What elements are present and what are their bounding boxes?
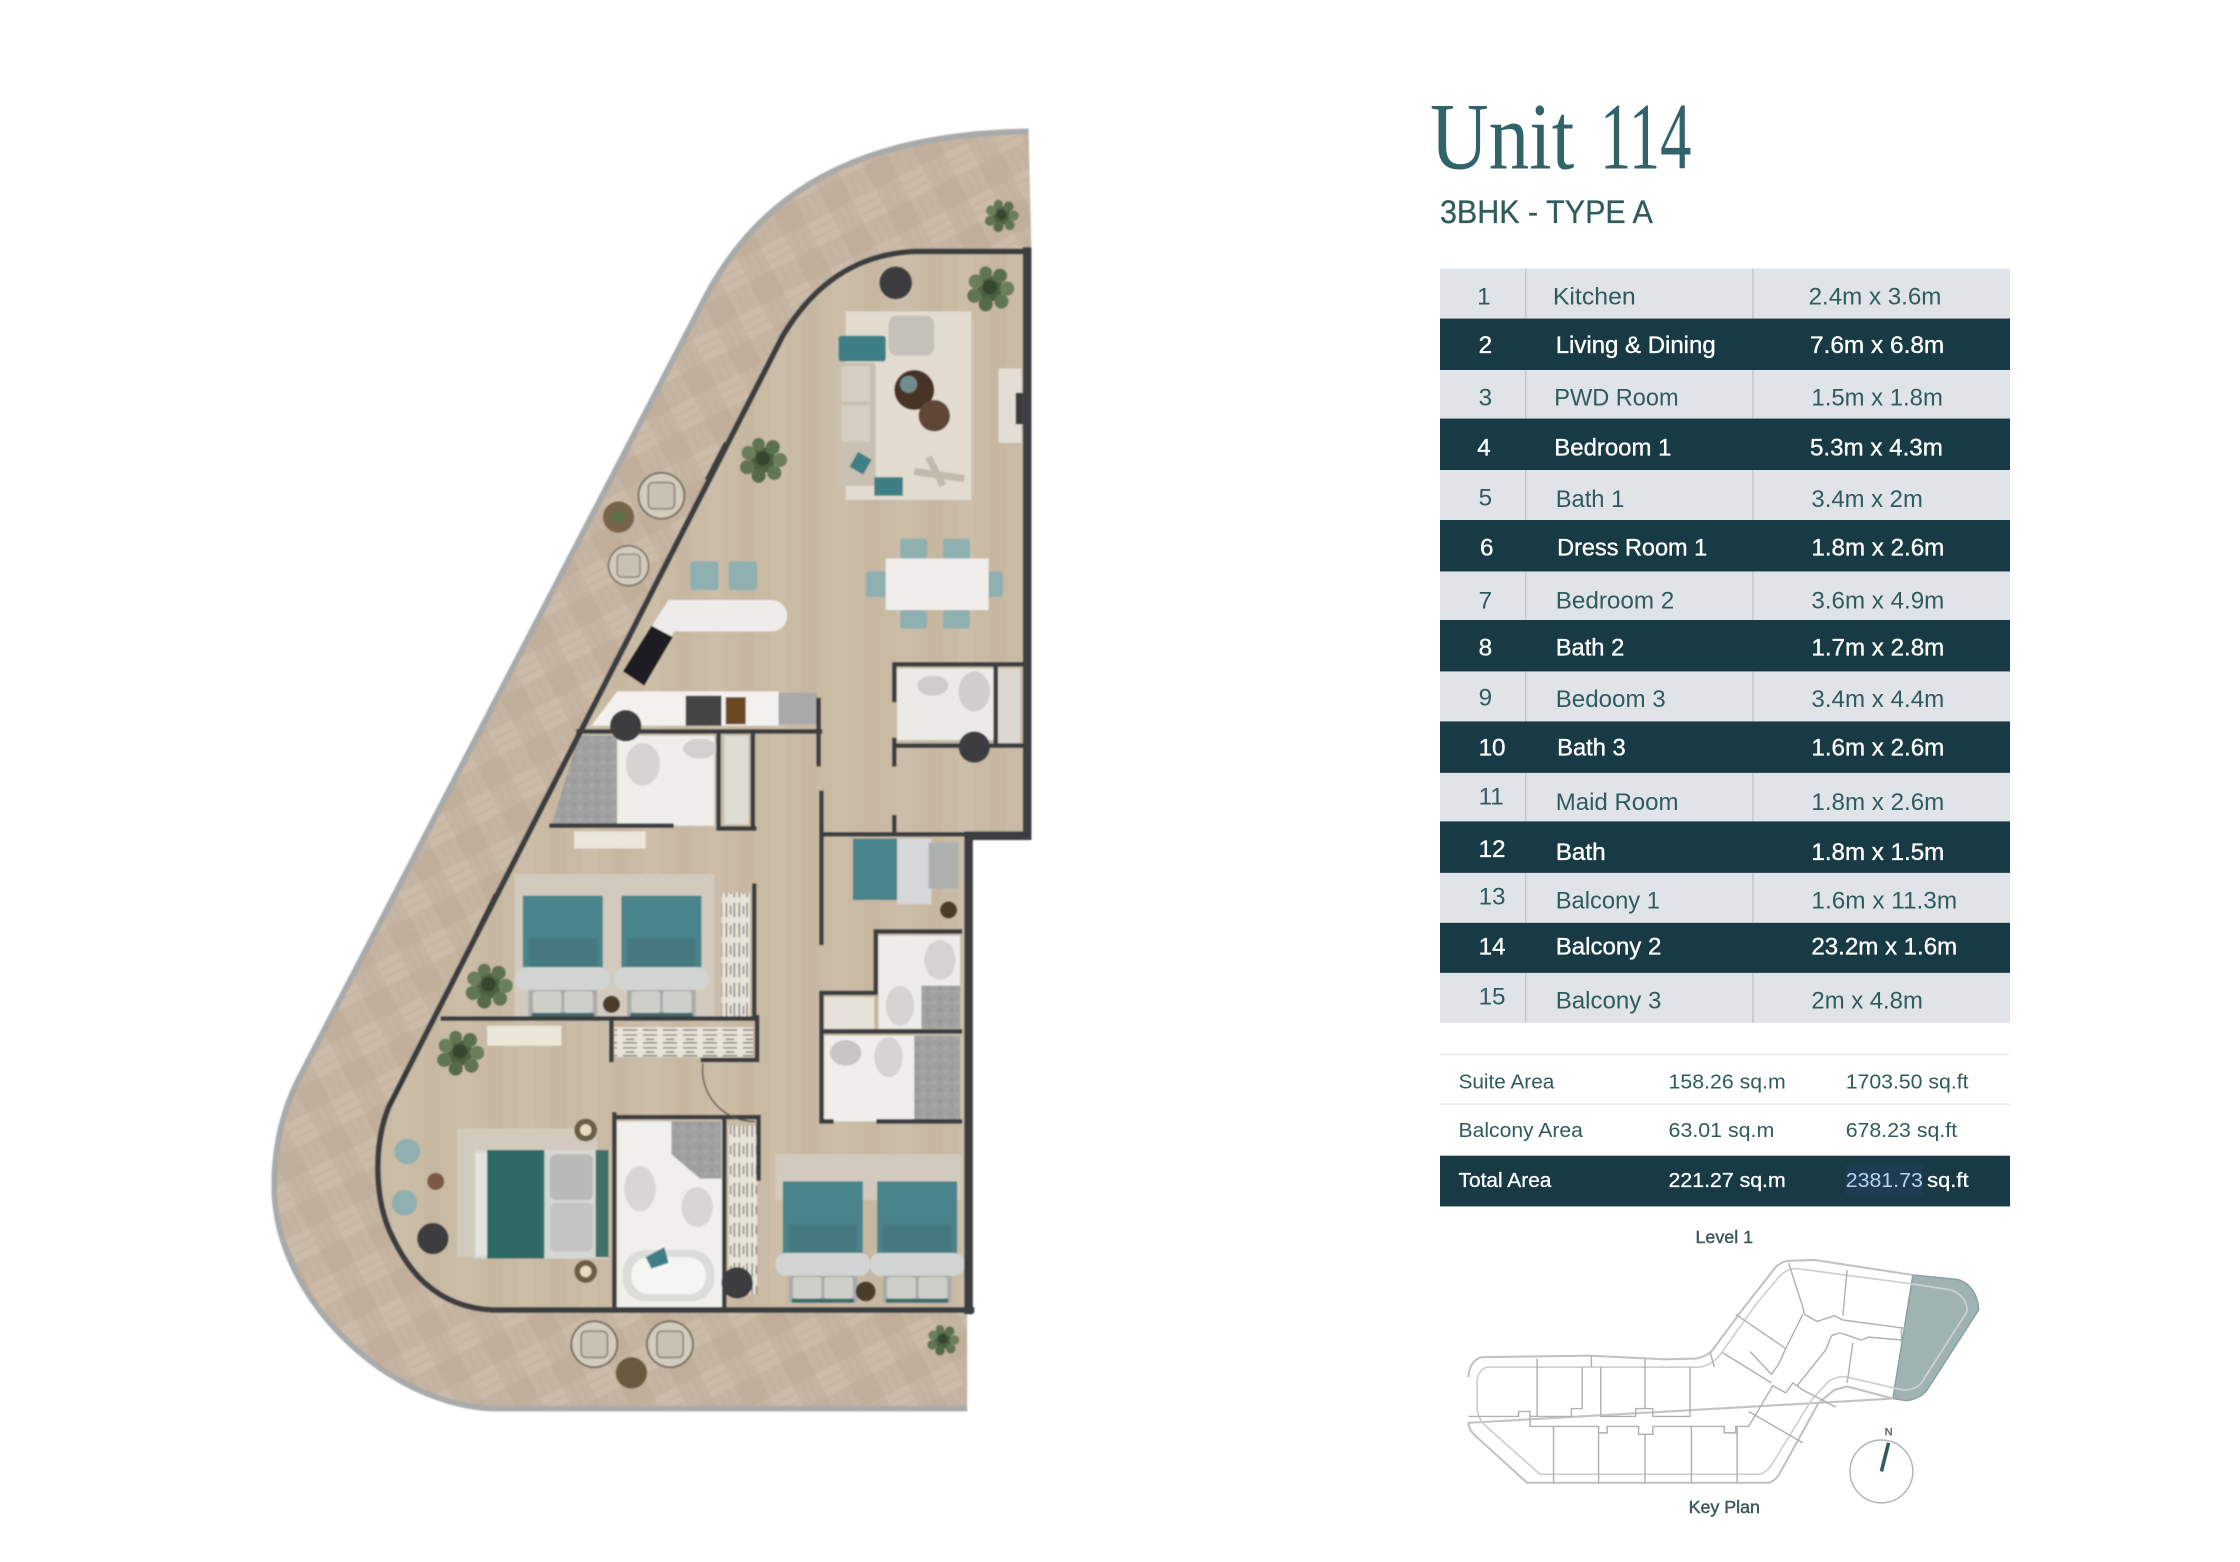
row 13 (1479, 883, 1957, 915)
key plan (1469, 1260, 1979, 1483)
row 12 (1479, 836, 1944, 866)
row 13: Balcony 1 (1556, 888, 1660, 915)
row 7 (1479, 588, 1944, 615)
balcony area: 63.01 sq.m (1669, 1119, 1774, 1142)
row 2: Living & Dining (1556, 332, 1716, 359)
row 1: 1 (1477, 283, 1491, 310)
row 14: 23.2m x 1.6m (1811, 933, 1957, 960)
row 9: 9 (1479, 685, 1492, 712)
balcony area: Balcony Area (1459, 1119, 1583, 1142)
title: 114 (1600, 84, 1691, 190)
subtitle: 3BHK - TYPE A (1440, 193, 1653, 230)
bath 2 (824, 1036, 960, 1121)
row 8: Bath 2 (1556, 635, 1624, 662)
row 1 (1477, 283, 1941, 310)
row 9: 3.4m x 4.4m (1811, 686, 1944, 713)
highlighted unit (1893, 1275, 1979, 1401)
walls (378, 251, 1027, 1310)
column (879, 266, 912, 299)
room schedule table (1440, 269, 2010, 1023)
row 12: Bath (1556, 839, 1606, 866)
row 1: 2.4m x 3.6m (1809, 283, 1941, 310)
row 4 (1477, 435, 1943, 462)
row 10: 10 (1479, 735, 1506, 762)
upper bath and closet (551, 736, 749, 849)
row 6: Dress Room 1 (1557, 535, 1707, 562)
stone balustrade rim (271, 129, 1029, 1411)
row 11: 1.8m x 2.6m (1811, 789, 1944, 816)
row 15: 15 (1479, 983, 1506, 1010)
total area: 221.27 sq.m (1669, 1169, 1786, 1192)
row 9: Bedoom 3 (1556, 686, 1666, 713)
suite area: Suite Area (1459, 1071, 1555, 1094)
area summary table (1440, 1054, 2010, 1206)
row 9 (1479, 685, 1944, 713)
row 8 (1479, 635, 1944, 662)
row 11 (1479, 783, 1944, 816)
master bedroom (391, 1119, 609, 1283)
row 15 (1479, 983, 1923, 1015)
row 6: 6 (1480, 535, 1493, 562)
master bath and wardrobe (617, 1121, 757, 1307)
terrace furniture (571, 473, 693, 1389)
row 4: Bedroom 1 (1554, 435, 1671, 462)
row 2: 7.6m x 6.8m (1810, 332, 1944, 359)
row 11: 11 (1479, 783, 1504, 810)
row 12: 1.8m x 1.5m (1811, 839, 1944, 866)
row 13: 13 (1479, 883, 1506, 910)
suite area: 1703.50 sq.ft (1846, 1071, 1969, 1094)
row 5: Bath 1 (1556, 486, 1624, 513)
dining set (866, 539, 1003, 629)
row 8: 8 (1479, 635, 1492, 662)
balcony area: 678.23 sq.ft (1846, 1119, 1957, 1142)
row 7: 7 (1479, 588, 1492, 615)
plants (437, 200, 1019, 1356)
row 14 (1479, 933, 1957, 960)
interior floor (378, 251, 1026, 1310)
row 2 (1479, 332, 1944, 359)
floor plan (257, 114, 1043, 1429)
row 6 (1480, 535, 1944, 562)
row 8: 1.7m x 2.8m (1811, 635, 1944, 662)
maid room (853, 839, 959, 919)
living area (839, 311, 1023, 500)
row 12: 12 (1479, 836, 1506, 863)
row 14: Balcony 2 (1556, 933, 1661, 960)
row 3: 1.5m x 1.8m (1811, 385, 1943, 412)
row 7: Bedroom 2 (1556, 588, 1674, 615)
bath 3 (824, 936, 960, 1029)
row 5: 3.4m x 2m (1811, 486, 1923, 513)
total area (1459, 1166, 1969, 1194)
bedroom 3 (776, 1154, 964, 1303)
row 3 (1479, 385, 1943, 412)
row 13: 1.6m x 11.3m (1811, 888, 1957, 915)
row 4: 4 (1477, 435, 1491, 462)
row 3: PWD Room (1554, 385, 1679, 412)
PWD room (897, 669, 1020, 743)
row 10: Bath 3 (1557, 735, 1626, 762)
row 5: 5 (1479, 485, 1492, 512)
compass: N (1884, 1427, 1893, 1439)
total area: Total Area (1459, 1169, 1552, 1192)
row 15: Balcony 3 (1556, 988, 1661, 1015)
row 1: Kitchen (1553, 283, 1636, 310)
compass (1850, 1427, 1913, 1503)
row 14: 14 (1479, 933, 1506, 960)
row 10 (1479, 735, 1944, 762)
bedroom 2 (487, 874, 753, 1057)
row 3: 3 (1479, 385, 1492, 412)
total area: 2381.73 (1846, 1169, 1923, 1192)
key plan label: Key Plan (1689, 1497, 1760, 1517)
row 7: 3.6m x 4.9m (1811, 588, 1944, 615)
row 4: 5.3m x 4.3m (1810, 435, 1943, 462)
suite area (1459, 1071, 1969, 1094)
kitchen (591, 561, 817, 726)
balcony area (1459, 1119, 1957, 1142)
suite area: 158.26 sq.m (1669, 1071, 1786, 1094)
balcony terrace (257, 114, 1043, 1429)
row 10: 1.6m x 2.6m (1811, 735, 1944, 762)
row 5 (1479, 485, 1923, 513)
title: Unit (1430, 84, 1575, 190)
row 15: 2m x 4.8m (1811, 988, 1923, 1015)
level label: Level 1 (1696, 1227, 1753, 1247)
row 2: 2 (1479, 332, 1492, 359)
row 11: Maid Room (1556, 789, 1679, 816)
title (1430, 84, 1691, 190)
total area: sq.ft (1927, 1169, 1969, 1192)
row 6: 1.8m x 2.6m (1811, 535, 1944, 562)
